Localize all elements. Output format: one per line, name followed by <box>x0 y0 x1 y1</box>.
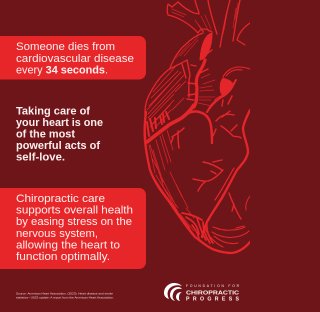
logo wordmark: FOUNDATION FOR <box>186 284 240 288</box>
panel: heart disease statistic <box>0 36 146 80</box>
panel: chiropractic care <box>0 188 146 269</box>
heading: self-love message: powerful acts of <box>16 140 100 152</box>
chiropractic text: nervous system, <box>16 228 98 240</box>
source citation: Source: American Heart Association. (2023). Heart disease and stroke <box>16 292 113 296</box>
logo wordmark: CHIROPRACTIC <box>186 290 239 296</box>
source citation <box>16 292 114 300</box>
heading: self-love message: self-love. <box>16 152 65 164</box>
chiropractic text: supports overall health <box>16 204 133 216</box>
statistic text: Someone dies from <box>16 41 115 53</box>
chiropractic text <box>16 193 133 263</box>
heading: self-love message <box>16 106 103 164</box>
logo: Foundation for Chiropractic Progress <box>164 283 240 302</box>
vessel blob <box>220 78 233 96</box>
chiropractic text: allowing the heart to <box>16 240 120 252</box>
heading: self-love message: Taking care of <box>16 106 90 118</box>
source citation: statistics—2023 update: A report from the American Heart Association. <box>16 296 114 300</box>
icon: logo swoosh <box>164 283 182 301</box>
background <box>0 0 250 312</box>
statistic text: every 34 seconds. <box>16 64 108 76</box>
heading: self-love message: your heart is one <box>16 117 103 129</box>
logo wordmark: PROGRESS <box>186 296 240 302</box>
logo wordmark <box>186 284 240 302</box>
chiropractic text: Chiropractic care <box>16 193 105 205</box>
heading: self-love message: of the most <box>16 128 75 140</box>
statistic text <box>16 41 134 76</box>
chiropractic text: by easing stress on the <box>16 216 132 228</box>
illustration: anatomical heart <box>145 0 250 253</box>
statistic text: cardiovascular disease <box>16 53 134 65</box>
chiropractic text: function optimally. <box>16 251 110 263</box>
